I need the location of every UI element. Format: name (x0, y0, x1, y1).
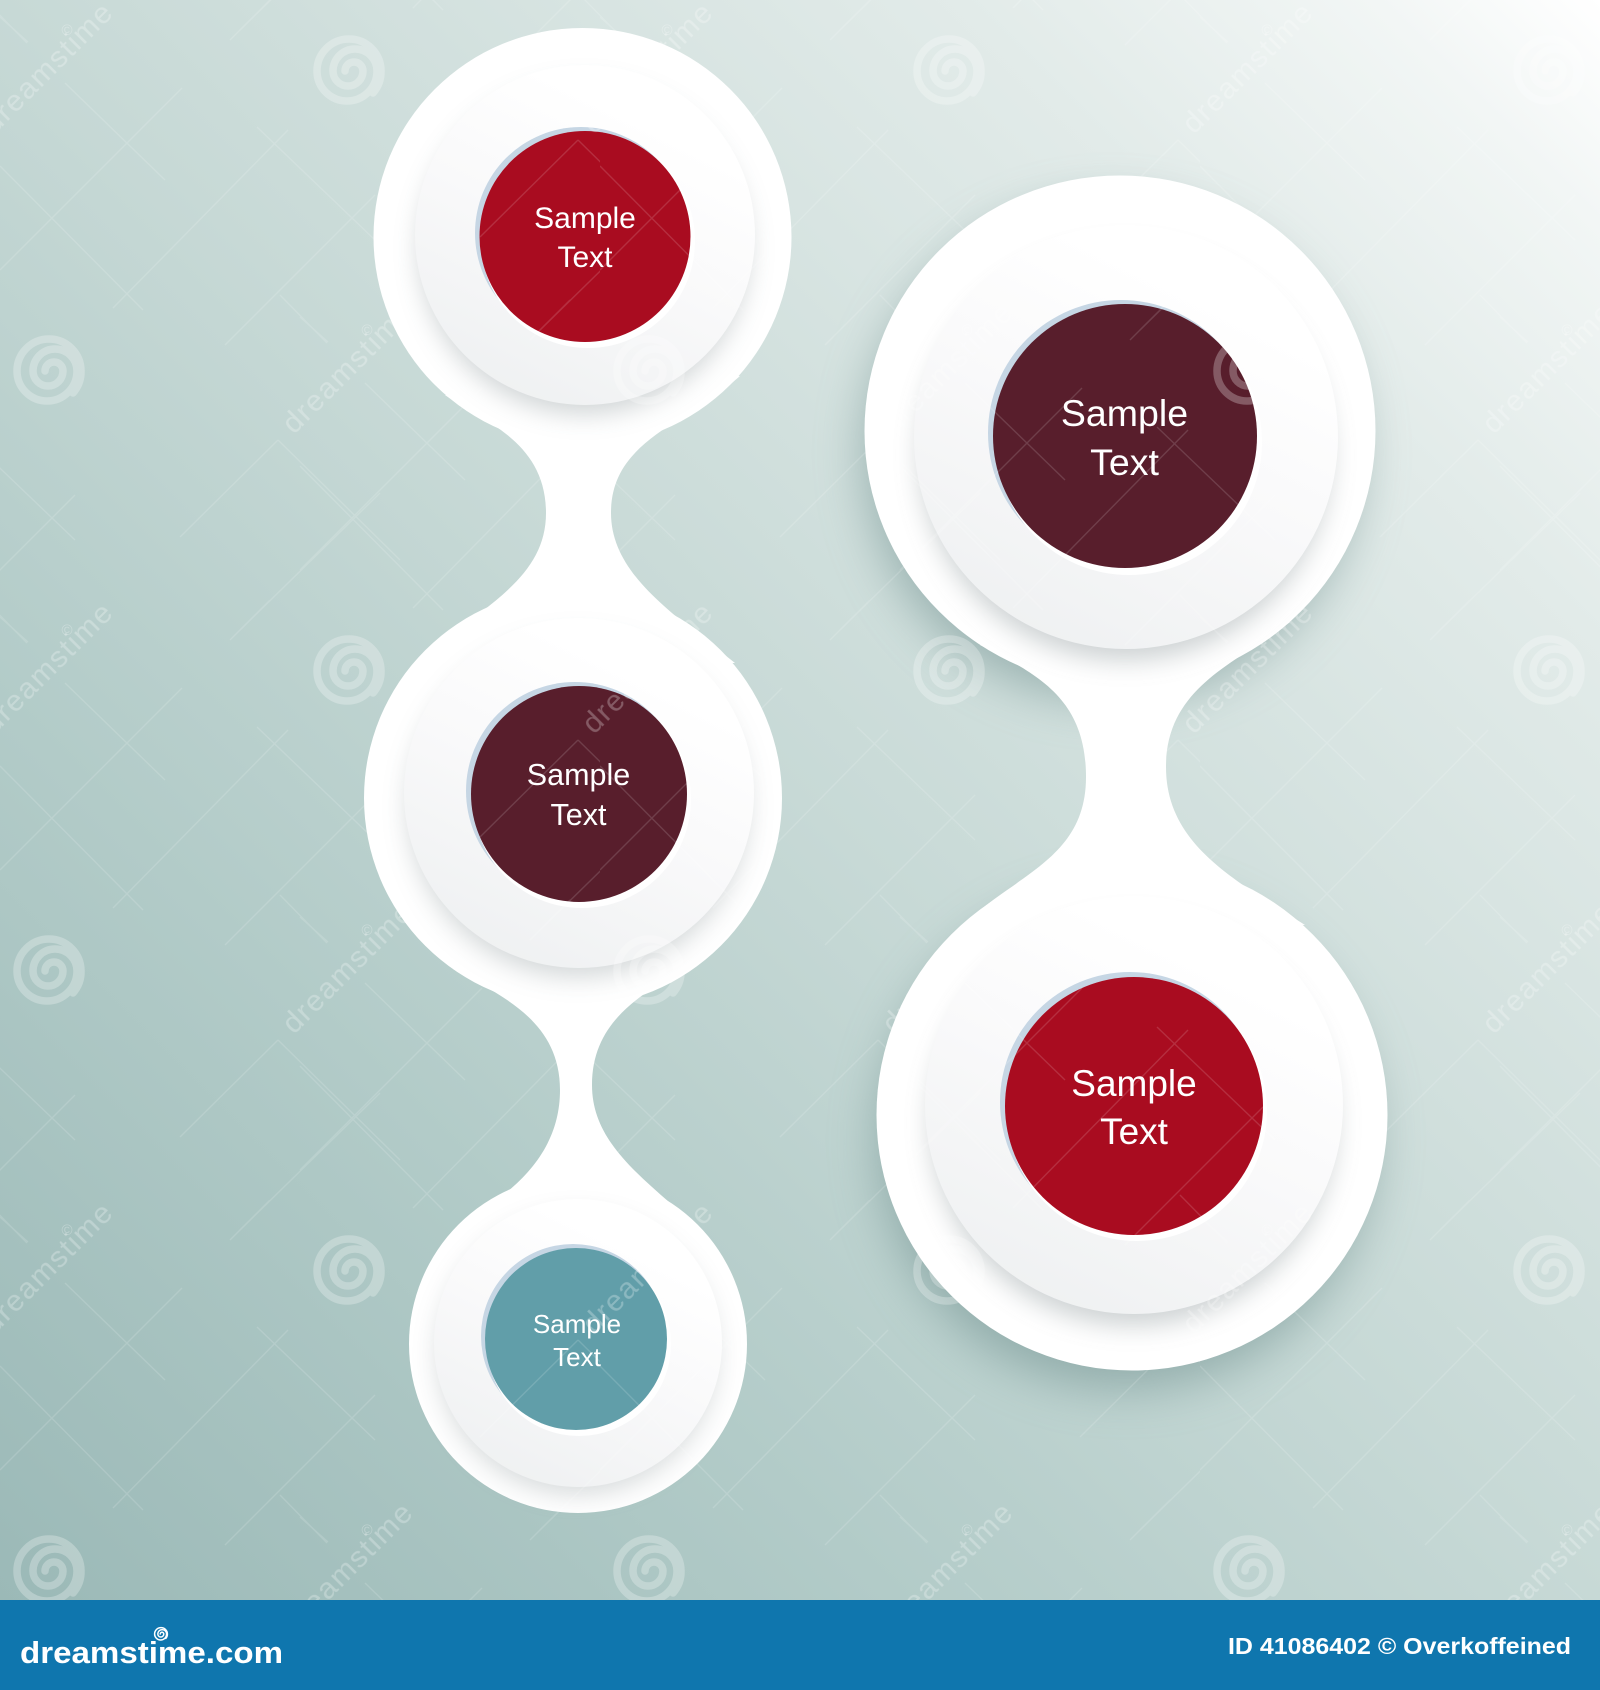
teal disc (485, 1248, 667, 1430)
watermark copyright marks: © (961, 322, 973, 339)
blue rim crescent (481, 1244, 665, 1428)
watermark wordmarks: dreamstime (576, 597, 719, 740)
plate shadow (931, 921, 1335, 1325)
watermark wordmarks: dreamstime (876, 897, 1019, 1040)
lower highlight (481, 134, 695, 348)
watermark copyright marks: © (961, 922, 973, 939)
lower highlight (473, 690, 691, 908)
right chain drop shadow (864, 204, 1374, 1388)
plate shadow (420, 85, 748, 413)
watermark copyright marks: © (661, 22, 673, 39)
label: Text (557, 241, 613, 274)
label: Text (1100, 1111, 1169, 1152)
plate (404, 618, 754, 968)
plate shadow (409, 638, 747, 976)
watermark wordmarks: dreamstime (576, 1197, 719, 1340)
label: Text (1090, 441, 1159, 483)
plate (434, 1199, 722, 1487)
node 4: large maroon circle (914, 225, 1338, 660)
watermark copyright marks: © (361, 322, 373, 339)
right chain of two linked circles (864, 176, 1388, 1388)
label: Text (553, 1342, 602, 1372)
watermark copyright marks: © (661, 1222, 673, 1239)
right chain white body (864, 176, 1388, 1370)
label: Sample (527, 758, 630, 792)
node 3: teal circle (434, 1199, 722, 1494)
footer image id and credit: ID 41086402 © Overkoffeined (1228, 1633, 1571, 1659)
watermark wordmarks: dreamstime (1176, 597, 1319, 740)
watermark copyright marks: © (1561, 322, 1573, 339)
watermark copyright marks: © (661, 622, 673, 639)
blue rim crescent (466, 682, 684, 900)
label: Sample (534, 202, 636, 235)
watermark copyright marks: © (1561, 1522, 1573, 1539)
maroon disc (471, 686, 687, 902)
watermark copyright marks: © (1261, 22, 1273, 39)
red disc (1005, 977, 1263, 1235)
blue rim crescent (988, 300, 1254, 566)
left chain white body (364, 28, 792, 1513)
label: Sample (1071, 1063, 1197, 1104)
footer banner (0, 1600, 1600, 1690)
watermark copyright marks: © (61, 22, 73, 39)
blue rim crescent (475, 127, 687, 339)
lower highlight (996, 309, 1262, 575)
plate shadow (438, 1216, 716, 1494)
watermark wordmarks: dreamstime (876, 1497, 1019, 1640)
red disc (480, 131, 690, 342)
plate (914, 225, 1338, 649)
watermark wordmarks: dreamstime (1176, 1197, 1319, 1340)
blue rim crescent (1000, 972, 1260, 1232)
watermark copyright marks: © (61, 1222, 73, 1239)
footer logo spiral (155, 1628, 167, 1640)
footer logo text: dreamstime.com (20, 1635, 283, 1670)
watermark copyright marks: © (1261, 1222, 1273, 1239)
label: Text (551, 798, 607, 832)
watermark copyright marks: © (1561, 922, 1573, 939)
watermark wordmarks: dreamstime (1176, 0, 1319, 140)
node 5: large red circle (925, 896, 1343, 1325)
label: Sample (1061, 392, 1188, 434)
watermark wordmarks: dreamstime (276, 897, 419, 1040)
node 2: dark maroon circle (404, 618, 754, 976)
plate (415, 65, 755, 405)
lower highlight (487, 1252, 671, 1436)
watermark copyright marks: © (1261, 622, 1273, 639)
label: Sample (533, 1309, 621, 1339)
watermark wordmarks: dreamstime (576, 0, 719, 140)
plate (925, 896, 1343, 1314)
maroon disc (993, 304, 1257, 568)
lower highlight (1007, 981, 1267, 1241)
watermark copyright marks: © (361, 1522, 373, 1539)
node 1: red circle (415, 65, 755, 413)
left chain of three linked circles (364, 28, 792, 1513)
watermark copyright marks: © (361, 922, 373, 939)
watermark wordmarks: dreamstime (276, 297, 419, 440)
watermark copyright marks: © (961, 1522, 973, 1539)
watermark wordmarks: dreamstime (276, 1497, 419, 1640)
watermark copyright marks: © (61, 622, 73, 639)
plate shadow (920, 250, 1330, 660)
watermark wordmarks: dreamstime (876, 297, 1019, 440)
